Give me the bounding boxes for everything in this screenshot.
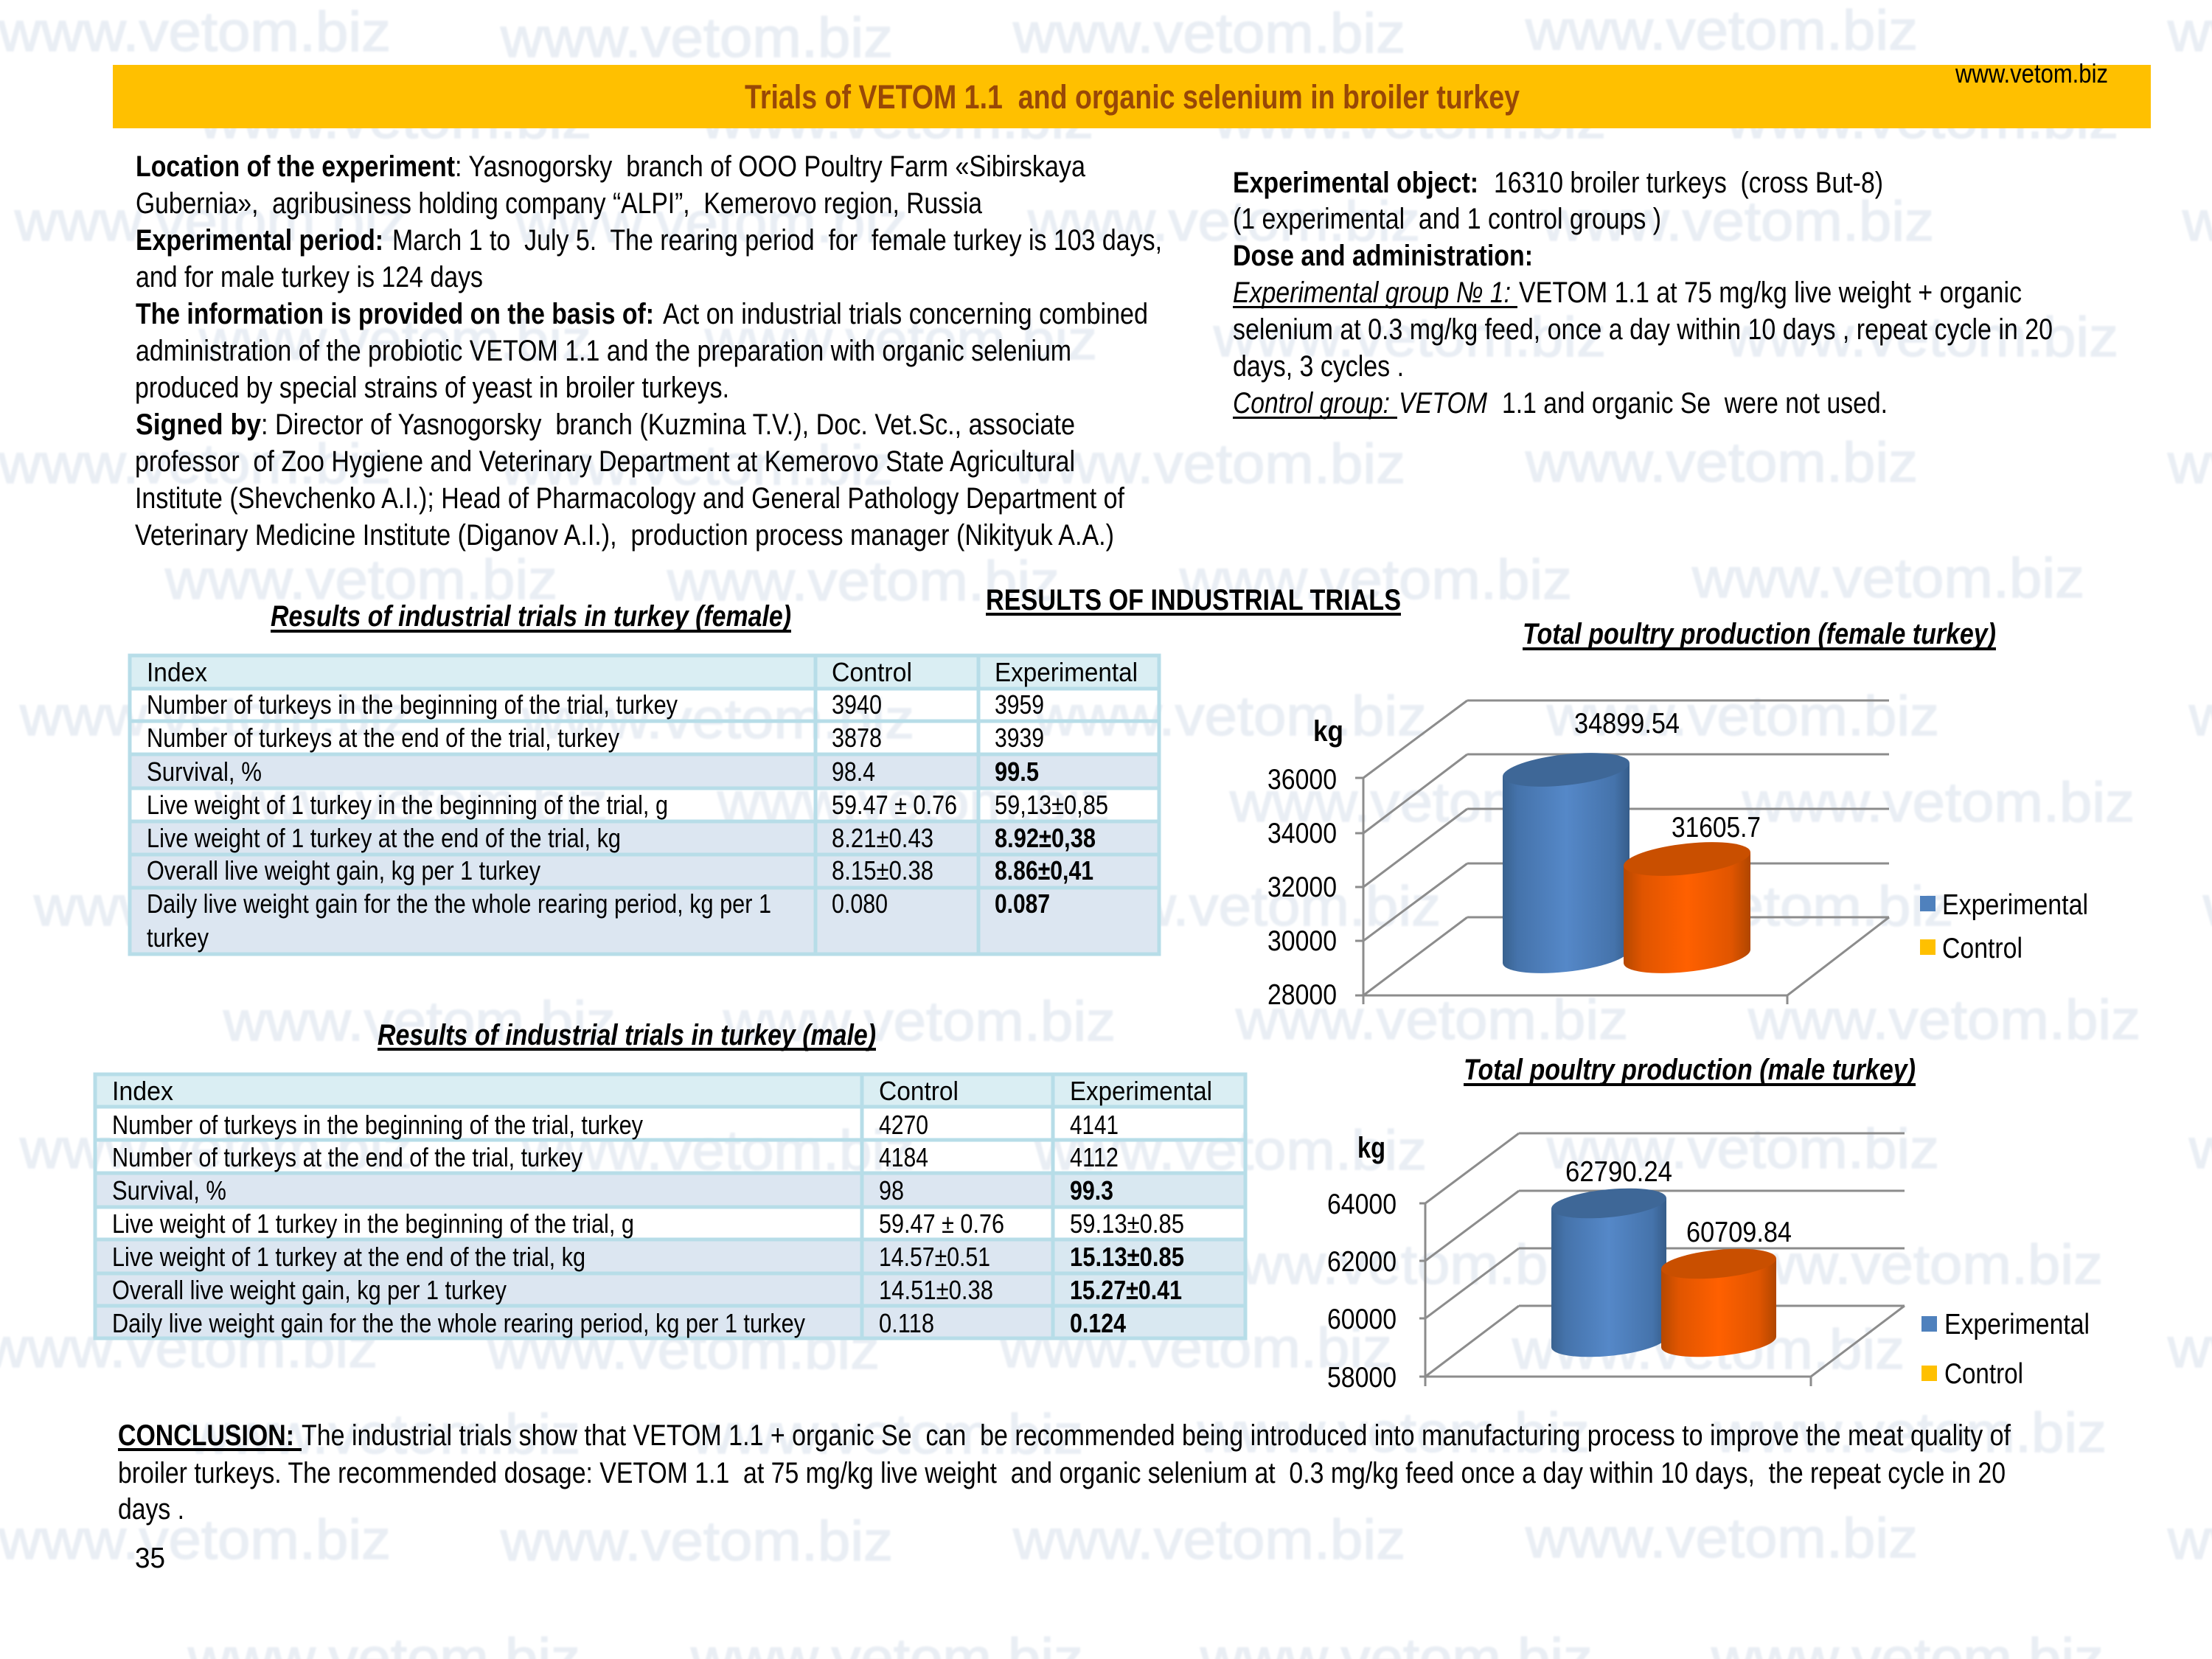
watermark pattern: www.vetom.biz	[999, 1317, 1392, 1380]
row: overall gain: 15.27±0.41	[1070, 1275, 1182, 1305]
text block: experimental object and dose: days, 3 cycles .	[1233, 350, 1404, 383]
row: live weight at beginning: 59,13±0,85	[995, 790, 1108, 820]
watermark pattern: www.vetom.biz	[223, 990, 616, 1053]
watermark pattern: www.vetom.biz	[1512, 1318, 1905, 1381]
row: daily gain: 0.080	[832, 888, 888, 919]
y axis labels	[1327, 1132, 1397, 1394]
text block: experimental object and dose: 16310 broiler turkeys (cross But-8)	[1494, 167, 1883, 199]
row: live weight at beginning: Live weight of 1 turkey in the beginning of the trial, g	[112, 1208, 634, 1239]
row: survival: Survival, %	[147, 757, 262, 787]
row: turkeys at end: 3878	[832, 723, 882, 753]
section heading: results of industrial trials: RESULTS OF INDUSTRIAL TRIALS	[986, 584, 1401, 616]
watermark pattern: www.vetom.biz	[700, 88, 1093, 150]
text block: experiment details: Act on industrial trials concerning combined	[663, 298, 1148, 330]
watermark pattern: www.vetom.biz	[500, 1510, 893, 1573]
header row: Experimental	[1070, 1076, 1212, 1106]
y axis labels: 36000	[1267, 764, 1337, 796]
watermark pattern: www.vetom.biz	[500, 434, 893, 497]
y axis labels: 32000	[1267, 872, 1337, 903]
row: daily gain: 0.124	[1070, 1308, 1126, 1338]
watermark pattern: www.vetom.biz	[183, 1234, 576, 1296]
watermark pattern: www.vetom.biz	[0, 1509, 391, 1571]
watermark pattern: www.vetom.biz	[0, 1, 391, 63]
text block: experiment details: The information is provided on the basis of:	[136, 298, 654, 330]
legend	[1921, 1309, 2090, 1390]
watermark pattern: www.vetom.biz	[1213, 306, 1606, 369]
watermark pattern: www.vetom.biz	[1525, 0, 1918, 62]
watermark pattern: www.vetom.biz	[1691, 547, 2084, 610]
watermark pattern: www.vetom.biz	[1012, 2, 1405, 65]
bar: control	[1624, 837, 1750, 978]
watermark pattern: www.vetom.biz	[1012, 433, 1405, 495]
text block: experiment details: March 1 to July 5. The rearing period for female turkey is 103 days,	[392, 224, 1162, 257]
watermark pattern: www.vetom.biz	[717, 771, 1110, 834]
text block: experimental object and dose: VETOM	[1399, 387, 1488, 420]
row: live weight at end: 15.13±0.85	[1070, 1242, 1184, 1272]
y axis labels: kg	[1357, 1132, 1385, 1164]
title banner	[113, 58, 2151, 128]
text block: experiment details: Signed by	[136, 408, 262, 441]
watermark pattern: www.vetom.biz	[1197, 1402, 1590, 1464]
value labels: 31605.7	[1672, 812, 1761, 844]
y axis labels: kg	[1313, 715, 1343, 748]
watermark pattern: www.vetom.biz	[515, 192, 908, 254]
row: survival	[147, 757, 1039, 787]
watermark pattern: www.vetom.biz	[1034, 1119, 1427, 1182]
row: live weight at beginning: Live weight of 1 turkey in the beginning of the trial, g	[147, 790, 668, 820]
watermark pattern: www.vetom.biz	[1742, 771, 2135, 834]
watermark pattern: www.vetom.biz	[198, 88, 591, 150]
watermark pattern: www.vetom.biz	[198, 309, 591, 372]
row: survival	[112, 1175, 1113, 1206]
watermark pattern: www.vetom.biz	[1525, 1507, 1918, 1570]
chart: total poultry production female	[1267, 700, 2088, 1011]
watermark pattern: www.vetom.biz	[164, 549, 557, 611]
text block: experimental object and dose: 1.1 and organic Se were not used.	[1502, 387, 1888, 420]
y axis labels: 58000	[1327, 1362, 1397, 1394]
text block: experimental object and dose: VETOM 1.1 at 75 mg/kg live weight + organic	[1519, 276, 2022, 309]
text block: experiment details: administration of the probiotic VETOM 1.1 and the preparation with organic selenium	[136, 335, 1071, 367]
row: overall gain: Overall live weight gain, kg per 1 turkey	[112, 1275, 507, 1305]
row: turkeys at end	[147, 723, 1044, 753]
text block: experiment details: : Yasnogorsky branch of OOO Poultry Farm «Sibirskaya	[455, 150, 1086, 183]
row: turkeys at end: 4112	[1070, 1142, 1119, 1172]
text block: experiment details: Location of the experiment	[136, 150, 455, 183]
row: turkeys at end: 4184	[879, 1142, 928, 1172]
table: female turkey results	[130, 654, 1159, 954]
bar: experimental	[1551, 1184, 1666, 1361]
row: live weight at end: 8.21±0.43	[832, 823, 933, 853]
text block: experiment details: Veterinary Medicine Institute (Diganov A.I.), production process manager (Nikityuk A.A.)	[135, 519, 1114, 552]
bar: control	[1661, 1245, 1776, 1361]
website link: www.vetom.biz	[1955, 58, 2108, 88]
header row: Control	[879, 1076, 959, 1106]
row: daily gain	[147, 888, 1050, 953]
heading: female production chart: Total poultry production (female turkey)	[1523, 618, 1996, 650]
row: overall gain: 8.86±0,41	[995, 855, 1093, 886]
row: daily gain: Daily live weight gain for the the whole rearing period, kg per 1 turkey	[112, 1308, 805, 1338]
row: overall gain	[112, 1275, 1182, 1305]
row: live weight at end: 14.57±0.51	[879, 1242, 990, 1272]
watermark pattern: www.vetom.biz	[1546, 1118, 1939, 1180]
text block: conclusion: days .	[118, 1493, 184, 1526]
row: turkeys at end: 3939	[995, 723, 1044, 753]
text block: experiment details: : Director of Yasnogorsky branch (Kuzmina T.V.), Doc. Vet.Sc., associate	[261, 408, 1075, 441]
legend: Experimental	[1944, 1309, 2090, 1340]
page number: 35	[135, 1543, 165, 1574]
watermark pattern: www.vetom.biz	[33, 875, 426, 938]
y axis labels: 60000	[1327, 1304, 1397, 1335]
header row: Experimental	[995, 657, 1138, 687]
watermark pattern: www.vetom.biz	[1747, 989, 2140, 1051]
watermark pattern: www.vetom.biz	[0, 433, 391, 495]
row: daily gain: 0.087	[995, 888, 1050, 919]
watermark pattern: www.vetom.biz	[1027, 190, 1420, 253]
watermark pattern: www.vetom.biz	[1546, 685, 1939, 748]
watermark pattern: www.vetom.biz	[667, 550, 1060, 613]
watermark pattern: www.vetom.biz	[1725, 88, 2118, 150]
watermark pattern: www.vetom.biz	[19, 1118, 412, 1180]
watermark pattern: www.vetom.biz	[1197, 1234, 1590, 1296]
watermark pattern: www.vetom.biz	[1525, 431, 1918, 494]
row: overall gain: Overall live weight gain, kg per 1 turkey	[147, 855, 540, 886]
heading: male production chart: Total poultry production (male turkey)	[1464, 1054, 1916, 1086]
header row: Index	[112, 1076, 173, 1106]
y axis labels: 64000	[1327, 1189, 1397, 1220]
text block: experiment details: Institute (Shevchenko A.I.); Head of Pharmacology and General Pathology Department of	[135, 482, 1125, 515]
watermark pattern: www.vetom.biz	[535, 875, 928, 938]
row: turkeys at beginning: 3940	[832, 689, 882, 720]
watermark pattern: www.vetom.biz	[1048, 875, 1441, 938]
row: live weight at beginning: 59.47 ± 0.76	[832, 790, 957, 820]
watermark pattern: www.vetom.biz	[1229, 771, 1622, 834]
value labels: 62790.24	[1565, 1156, 1672, 1188]
row: turkeys at beginning: Number of turkeys in the beginning of the trial, turkey	[112, 1110, 643, 1140]
row: daily gain: 0.118	[879, 1308, 934, 1338]
watermark pattern: www.vetom.biz	[521, 688, 914, 751]
text block: experimental object and dose: Experimental group № 1:	[1233, 276, 1511, 309]
y axis labels	[1267, 715, 1343, 1011]
watermark pattern: www.vetom.biz	[685, 1234, 1078, 1296]
text block: experimental object and dose	[1233, 167, 2053, 420]
text block: experiment details: Gubernia», agribusiness holding company “ALPI”, Kemerovo region, Russia	[136, 187, 983, 220]
y axis labels: 28000	[1267, 979, 1337, 1011]
text block: experimental object and dose: Dose and administration:	[1233, 240, 1533, 272]
header row	[147, 657, 1138, 687]
row: turkeys at beginning: 4270	[879, 1110, 928, 1140]
value labels: 34899.54	[1574, 708, 1680, 740]
watermark pattern: www.vetom.biz	[1213, 88, 1606, 150]
text block: experimental object and dose: (1 experimental and 1 control groups )	[1233, 203, 1661, 235]
legend	[1920, 889, 2088, 964]
row: turkeys at beginning	[147, 689, 1044, 720]
watermark pattern: www.vetom.biz	[723, 990, 1116, 1053]
bar: experimental	[1503, 748, 1630, 978]
chart: total poultry production male	[1327, 1132, 2090, 1394]
text block: experiment details: produced by special strains of yeast in broiler turkeys.	[135, 372, 729, 404]
watermark pattern: www.vetom.biz	[690, 1403, 1083, 1466]
title: Trials of VETOM 1.1 and organic selenium in broiler turkey	[745, 78, 1520, 116]
row: live weight at end	[112, 1242, 1184, 1272]
text block: experiment details: professor of Zoo Hygiene and Veterinary Department at Kemerovo State Agricultural	[135, 445, 1075, 478]
row: live weight at end: Live weight of 1 turkey at the end of the trial, kg	[147, 823, 621, 853]
watermark pattern: www.vetom.biz	[704, 309, 1097, 372]
watermark pattern: www.vetom.biz	[1725, 306, 2118, 369]
legend: Control	[1942, 933, 2023, 964]
text block: experimental object and dose: Control group:	[1233, 387, 1390, 420]
row: live weight at beginning	[147, 790, 1108, 820]
row: turkeys at beginning: 4141	[1070, 1110, 1119, 1140]
row: live weight at end	[147, 823, 1096, 853]
row: survival: 98.4	[832, 757, 875, 787]
row: turkeys at end: Number of turkeys at the end of the trial, turkey	[147, 723, 619, 753]
row: daily gain: turkey	[147, 922, 209, 953]
watermark pattern: www.vetom.biz	[215, 771, 608, 834]
row: overall gain: 14.51±0.38	[879, 1275, 993, 1305]
y axis labels: 30000	[1267, 925, 1337, 957]
heading: female results table: Results of industrial trials in turkey (female)	[271, 600, 791, 633]
text block: experiment details	[135, 150, 1162, 552]
watermark pattern: www.vetom.biz	[1560, 875, 1953, 938]
value labels	[1574, 708, 1761, 844]
watermark pattern: www.vetom.biz	[187, 1403, 580, 1466]
row: live weight at end: 8.92±0,38	[995, 823, 1096, 853]
row: live weight at end: Live weight of 1 turkey at the end of the trial, kg	[112, 1242, 585, 1272]
watermark pattern: www.vetom.biz	[1012, 1509, 1405, 1571]
text block: experimental object and dose: Experimental object:	[1233, 167, 1478, 199]
y axis labels: 34000	[1267, 818, 1337, 849]
row: turkeys at end: Number of turkeys at the end of the trial, turkey	[112, 1142, 582, 1172]
header row: Index	[147, 657, 207, 687]
row: turkeys at end	[112, 1142, 1119, 1172]
row: live weight at beginning: 59.13±0.85	[1070, 1208, 1184, 1239]
row: turkeys at beginning: 3959	[995, 689, 1044, 720]
watermark pattern: www.vetom.biz	[1710, 1234, 2103, 1296]
row: survival: Survival, %	[112, 1175, 226, 1206]
row: turkeys at beginning	[112, 1110, 1119, 1140]
table: male turkey results	[95, 1073, 1245, 1338]
watermark pattern: www.vetom.biz	[1034, 685, 1427, 748]
header row: Control	[832, 657, 912, 687]
row: survival: 99.3	[1070, 1175, 1113, 1206]
row: daily gain: Daily live weight gain for the the whole rearing period, kg per 1	[147, 888, 771, 919]
row: survival: 99.5	[995, 757, 1039, 787]
row: turkeys at beginning: Number of turkeys in the beginning of the trial, turkey	[147, 689, 678, 720]
watermark pattern: www.vetom.biz	[14, 190, 407, 253]
text block: conclusion	[118, 1419, 2011, 1526]
y axis labels: 62000	[1327, 1246, 1397, 1278]
text block: experiment details: and for male turkey is 124 days	[136, 261, 483, 293]
legend: Control	[1944, 1358, 2023, 1390]
text block: conclusion: CONCLUSION:	[118, 1419, 294, 1452]
text block: experimental object and dose: selenium at 0.3 mg/kg feed, once a day within 10 days , repeat cycle in 20	[1233, 313, 2053, 346]
heading: male results table: Results of industrial trials in turkey (male)	[378, 1019, 876, 1051]
watermark pattern: www.vetom.biz	[19, 685, 412, 748]
row: overall gain	[147, 855, 1093, 886]
watermark pattern: www.vetom.biz	[521, 1119, 914, 1182]
legend: Experimental	[1942, 889, 2088, 921]
value labels: 60709.84	[1686, 1217, 1792, 1248]
watermark pattern: www.vetom.biz	[1714, 1402, 2107, 1464]
watermark pattern: www.vetom.biz	[1179, 549, 1572, 611]
value labels	[1565, 1156, 1792, 1248]
watermark pattern: www.vetom.biz	[1541, 190, 1934, 253]
row: survival: 98	[879, 1175, 904, 1206]
watermark pattern: www.vetom.biz	[1235, 989, 1628, 1051]
header row	[112, 1076, 1212, 1106]
row: live weight at beginning: 59.47 ± 0.76	[879, 1208, 1004, 1239]
watermark pattern: www.vetom.biz	[487, 1318, 880, 1381]
text block: experiment details: Experimental period:	[136, 224, 383, 257]
row: overall gain: 8.15±0.38	[832, 855, 933, 886]
watermark pattern: www.vetom.biz	[500, 7, 893, 69]
row: live weight at beginning	[112, 1208, 1184, 1239]
